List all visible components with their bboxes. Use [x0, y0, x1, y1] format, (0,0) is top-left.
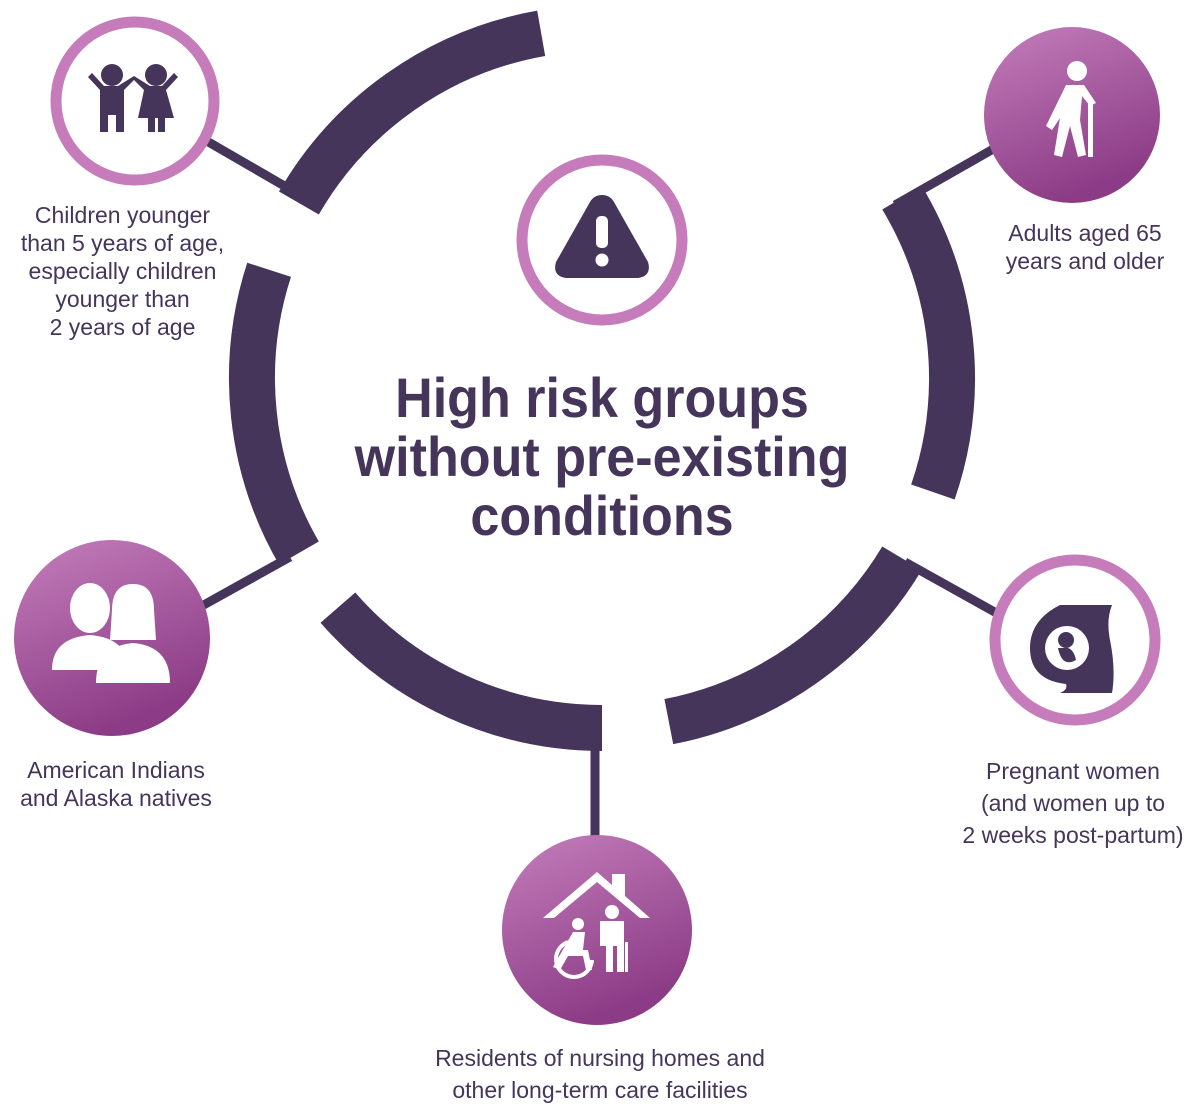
icon: nursing home: [502, 835, 692, 1025]
label: children: 2 years of age: [50, 314, 195, 340]
title: [354, 366, 849, 547]
label: children: [21, 202, 224, 340]
label: pregnant: [962, 758, 1184, 848]
label: nursing homes: other long-term care facilities: [452, 1077, 748, 1103]
ring arcs: [252, 33, 952, 728]
label: adults: years and older: [1006, 248, 1164, 274]
icon: pregnant: [995, 560, 1155, 720]
label: nursing homes: Residents of nursing homes and: [435, 1045, 765, 1071]
label: children: Children younger: [35, 202, 210, 228]
label: children: than 5 years of age,: [21, 230, 224, 256]
icon: elderly: [984, 27, 1160, 203]
connectors: [200, 140, 1000, 840]
icon: children: [56, 22, 214, 180]
label: american indians: American Indians: [27, 757, 205, 783]
label: american indians: and Alaska natives: [20, 785, 212, 811]
label: children: younger than: [55, 286, 190, 312]
label: adults: [1006, 220, 1164, 274]
label: american indians: [20, 757, 212, 811]
title: without pre-existing: [355, 425, 849, 488]
label: pregnant: (and women up to: [981, 790, 1165, 816]
title: conditions: [470, 484, 734, 547]
label: children: especially children: [29, 258, 216, 284]
label: nursing homes: [435, 1045, 765, 1103]
title: High risk groups: [395, 366, 809, 429]
label: adults: Adults aged 65: [1008, 220, 1162, 246]
label: pregnant: 2 weeks post-partum): [962, 822, 1184, 848]
icon: warning: [522, 160, 682, 320]
label: pregnant: Pregnant women: [986, 758, 1160, 784]
icon: people: [14, 540, 210, 736]
